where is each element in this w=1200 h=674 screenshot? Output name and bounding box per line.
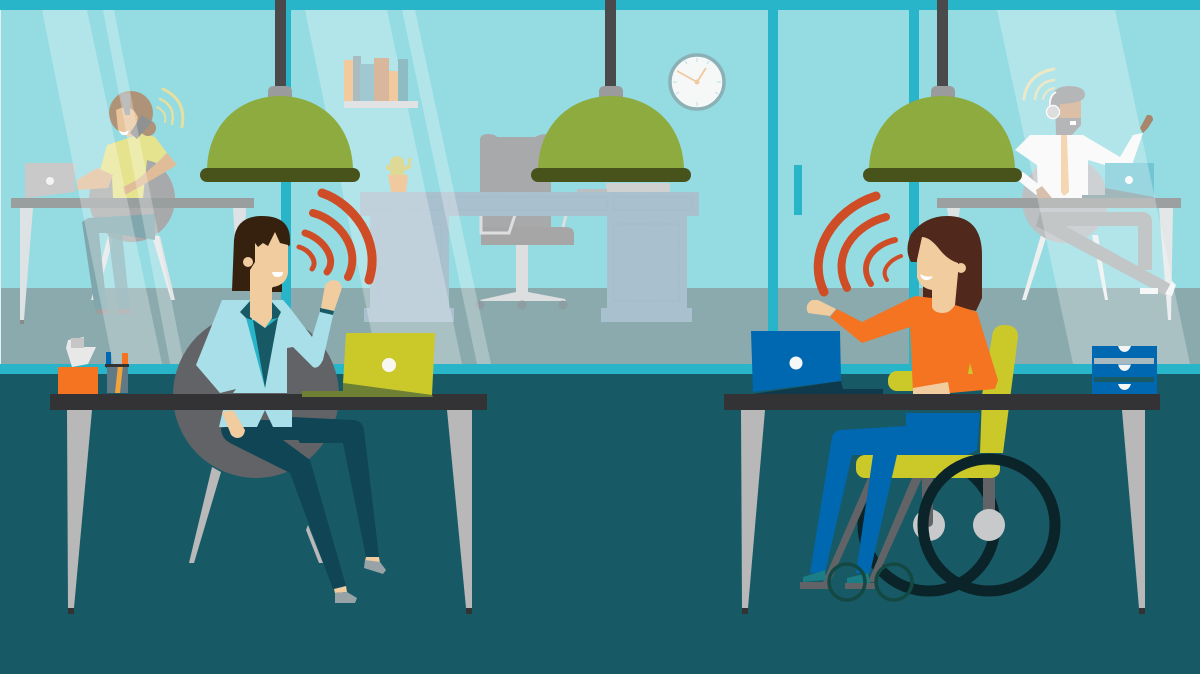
left main desk: [50, 394, 487, 614]
legs: [1036, 212, 1176, 296]
chair: [89, 156, 175, 300]
right main desk: [724, 394, 1160, 614]
laptop: [1082, 163, 1154, 198]
laptop: [25, 163, 75, 198]
wheelchair frame: [823, 478, 995, 582]
front wheel: [923, 459, 1055, 591]
pendant lamp right: [863, 0, 1022, 182]
background person: woman in yellow with headset: [11, 89, 254, 324]
wheelchair seat and backrest: [856, 325, 1018, 478]
desk legs: [20, 208, 246, 324]
bookshelf with books: [344, 56, 418, 108]
legs: [82, 214, 155, 314]
raised hand: [807, 300, 836, 316]
main person left: woman in light blue jacket: [173, 193, 386, 603]
cactus plant: [386, 156, 411, 192]
lower jacket: [219, 410, 292, 427]
blue laptop: [751, 331, 883, 394]
torso: [1015, 115, 1153, 198]
jacket: [196, 300, 334, 393]
hand on knee: [222, 410, 245, 438]
head: [109, 91, 156, 139]
hand on desk: [913, 382, 950, 394]
hair: [908, 216, 982, 311]
pendant lamp left: [200, 0, 360, 182]
legs: [221, 417, 379, 589]
background office chair: [476, 134, 574, 310]
main person right: woman in wheelchair: [800, 196, 1055, 600]
background person: man in white shirt with headset: [937, 69, 1181, 320]
chair: [173, 312, 339, 563]
pendant lamp centre: [531, 0, 691, 182]
raised hand with watch: [320, 280, 342, 315]
yellow laptop: [302, 333, 435, 397]
speech waves: [299, 193, 372, 280]
speech waves: [818, 196, 901, 292]
back wheel: [863, 459, 995, 591]
head and neck: [243, 232, 288, 328]
torso and arms: [77, 133, 177, 198]
background monitor on desk: [577, 183, 670, 192]
hair: [232, 216, 290, 292]
desk legs: [947, 208, 1173, 320]
shirt and lapels: [240, 301, 281, 388]
caster wheels: [829, 564, 912, 600]
front hub: [973, 509, 1005, 541]
desk top: [937, 198, 1181, 208]
wall clock: [670, 55, 724, 109]
desk top: [11, 198, 254, 208]
sound waves: [157, 89, 183, 127]
sound waves: [1024, 69, 1054, 99]
background executive desk: [360, 192, 699, 322]
blue file tray: [1092, 346, 1157, 394]
tissue box: [58, 337, 98, 394]
shoes: [334, 557, 386, 603]
head: [1046, 86, 1085, 135]
light beams through windows: [42, 10, 1190, 364]
chair: [1022, 157, 1108, 300]
head and neck: [917, 237, 966, 313]
trousers: [810, 413, 980, 573]
rear hub: [913, 509, 945, 541]
orange sweater: [830, 296, 998, 393]
pen holder: [105, 352, 129, 393]
foot rests and shoes: [800, 570, 875, 589]
gap under arm: [968, 363, 973, 374]
